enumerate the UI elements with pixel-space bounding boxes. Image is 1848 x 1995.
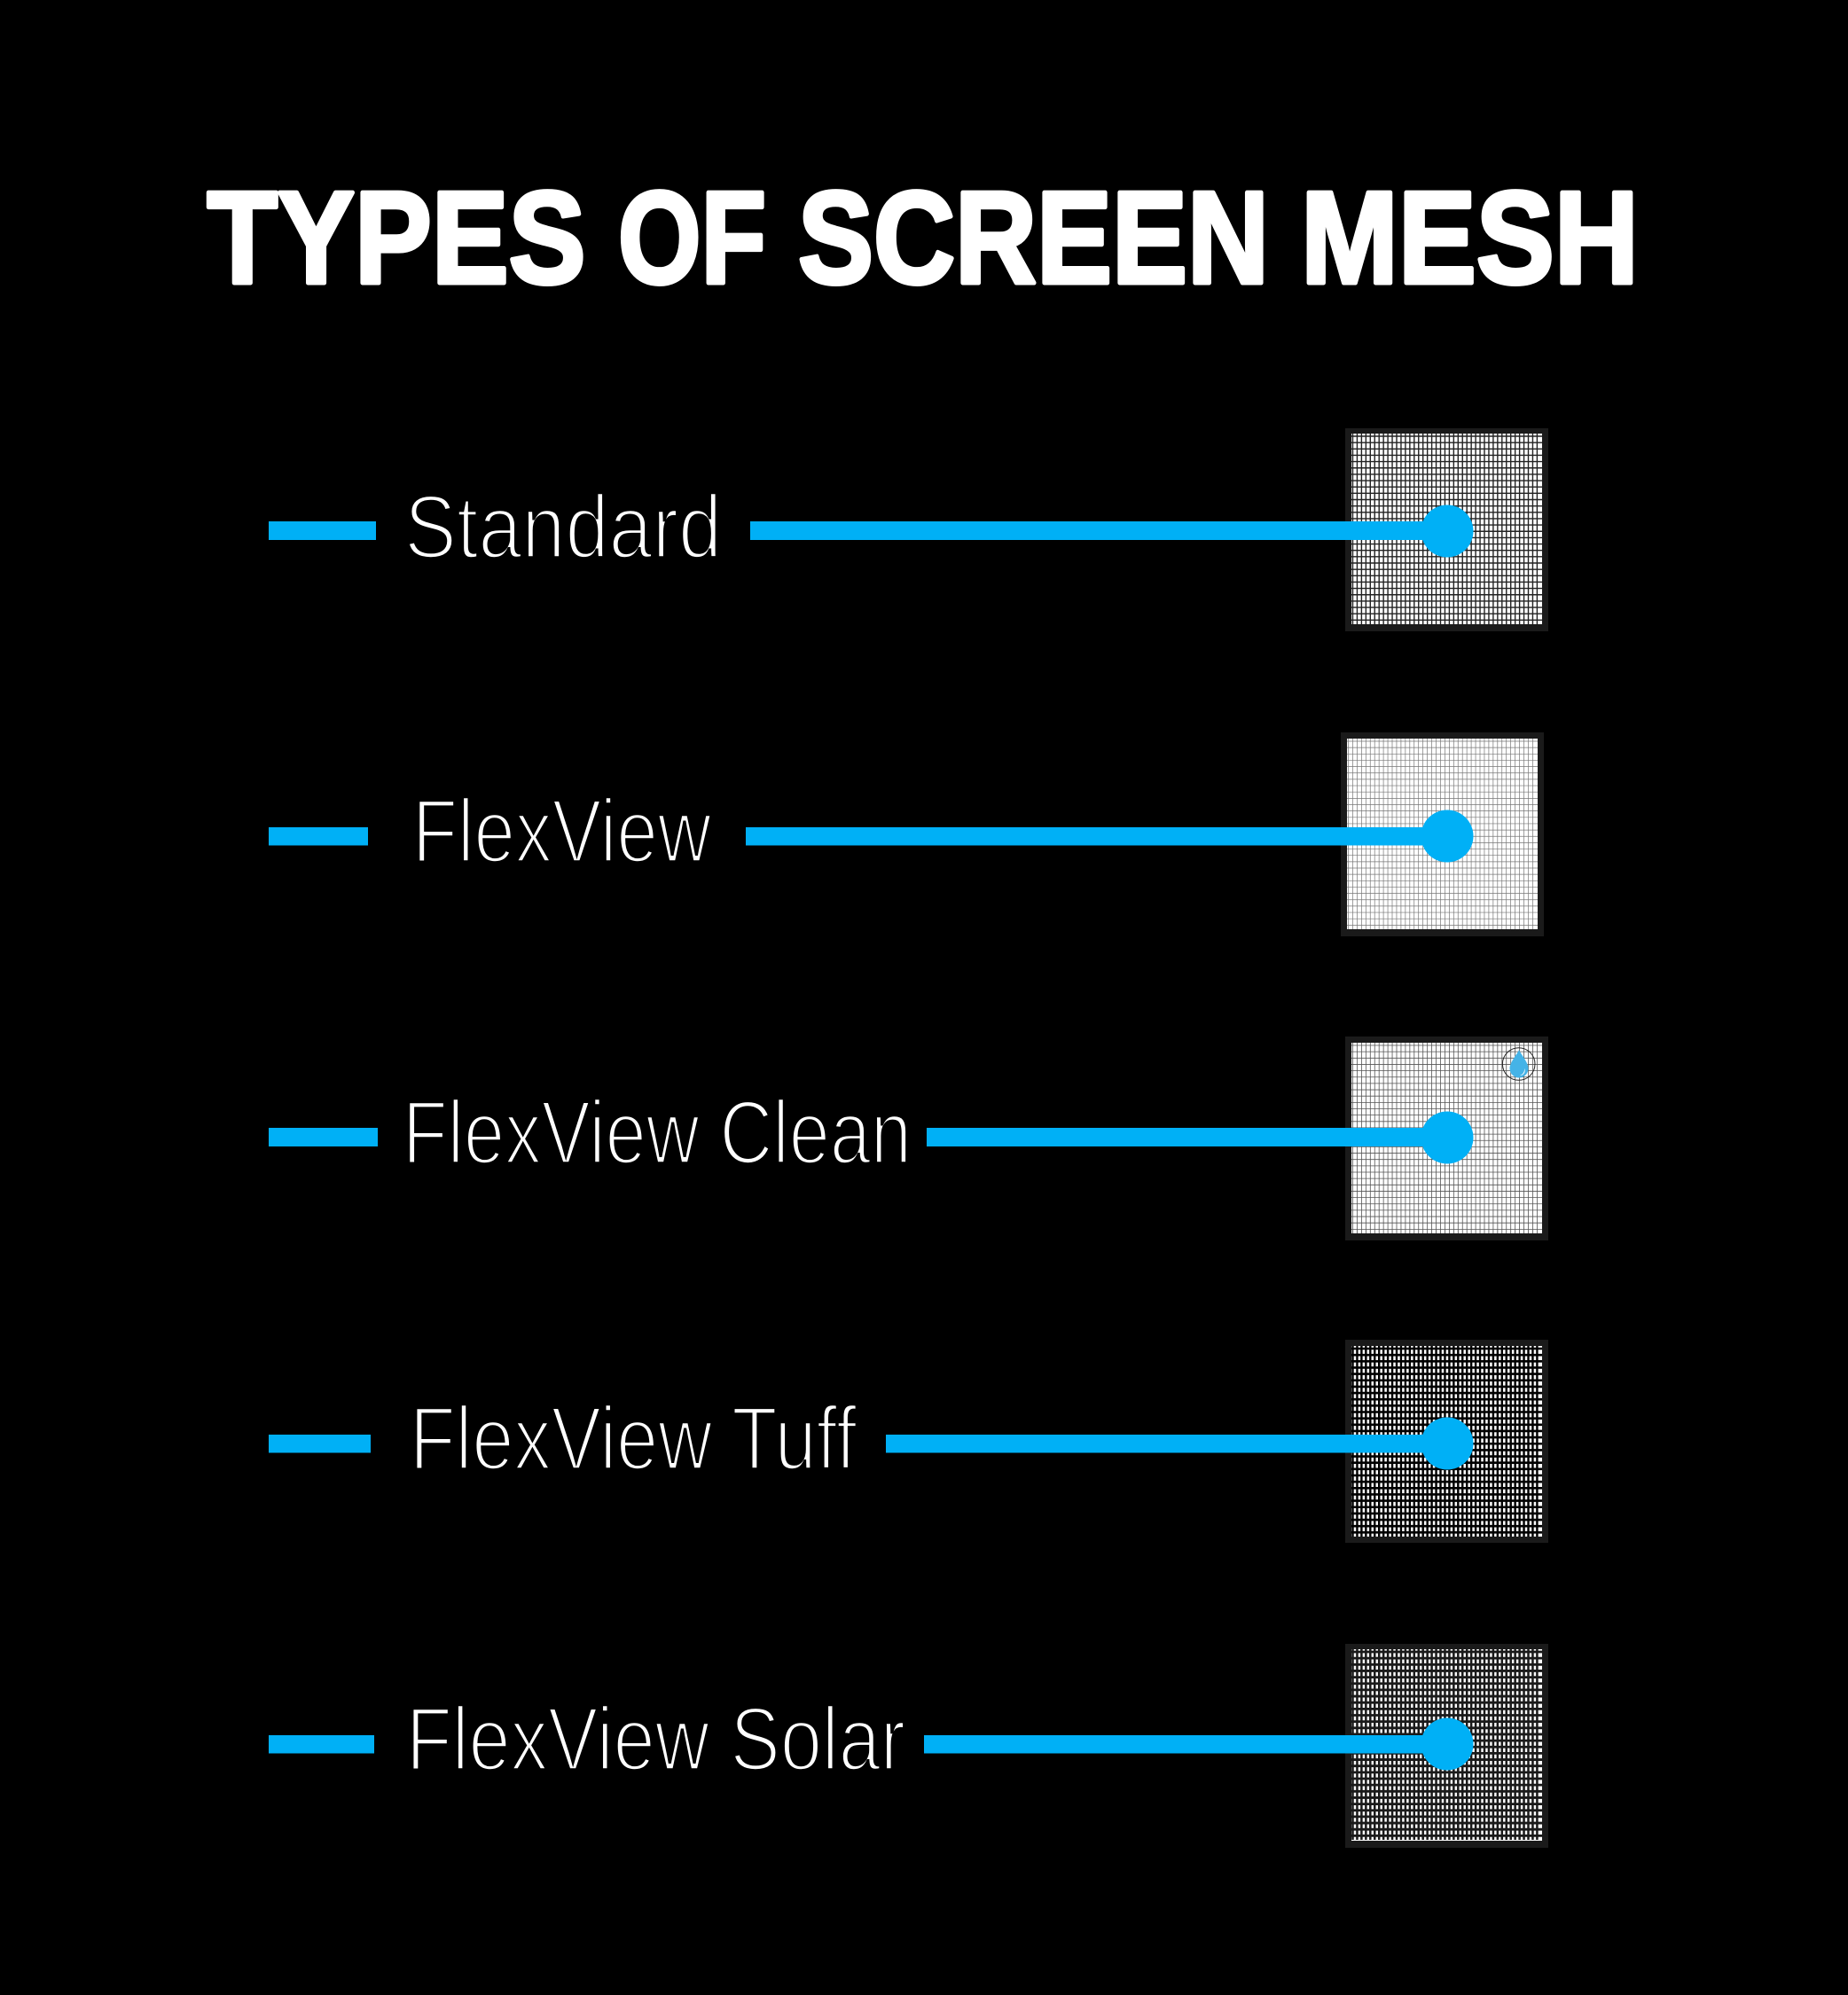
row: Standard	[269, 428, 1548, 631]
left dash	[269, 521, 376, 540]
label: FlexView: FlexView	[412, 782, 712, 881]
title: OF	[618, 165, 766, 311]
mesh swatch: FlexView Tuff	[1345, 1340, 1548, 1543]
left dash	[269, 1735, 374, 1754]
connector line with dot	[927, 1112, 1474, 1163]
left dash	[269, 827, 368, 846]
left dash	[269, 1128, 378, 1146]
label: FlexView Solar: FlexView Solar	[406, 1690, 905, 1789]
row: FlexView Tuff	[269, 1340, 1548, 1543]
mesh swatch: FlexView	[1341, 732, 1544, 936]
title: TYPES	[208, 165, 585, 311]
mesh swatch: FlexView Clean	[1345, 1037, 1548, 1240]
title: SCREEN	[798, 165, 1269, 311]
mesh swatch: Standard	[1345, 428, 1548, 631]
icon: water drop	[1502, 1048, 1535, 1080]
label: FlexView Tuff: FlexView Tuff	[410, 1389, 857, 1489]
label: FlexView Clean: FlexView Clean	[403, 1084, 912, 1183]
left dash	[269, 1435, 371, 1452]
connector line with dot	[886, 1417, 1474, 1470]
connector line with dot	[746, 810, 1474, 862]
mesh swatch: FlexView Solar	[1345, 1644, 1548, 1848]
connector line with dot	[750, 505, 1474, 557]
row: FlexView Solar	[269, 1644, 1548, 1848]
row: FlexView	[269, 732, 1544, 936]
row: FlexView Clean	[269, 1037, 1548, 1240]
label: Standard: Standard	[404, 478, 722, 577]
title: MESH	[1301, 165, 1639, 311]
title	[208, 165, 1639, 311]
connector line with dot	[924, 1718, 1474, 1770]
